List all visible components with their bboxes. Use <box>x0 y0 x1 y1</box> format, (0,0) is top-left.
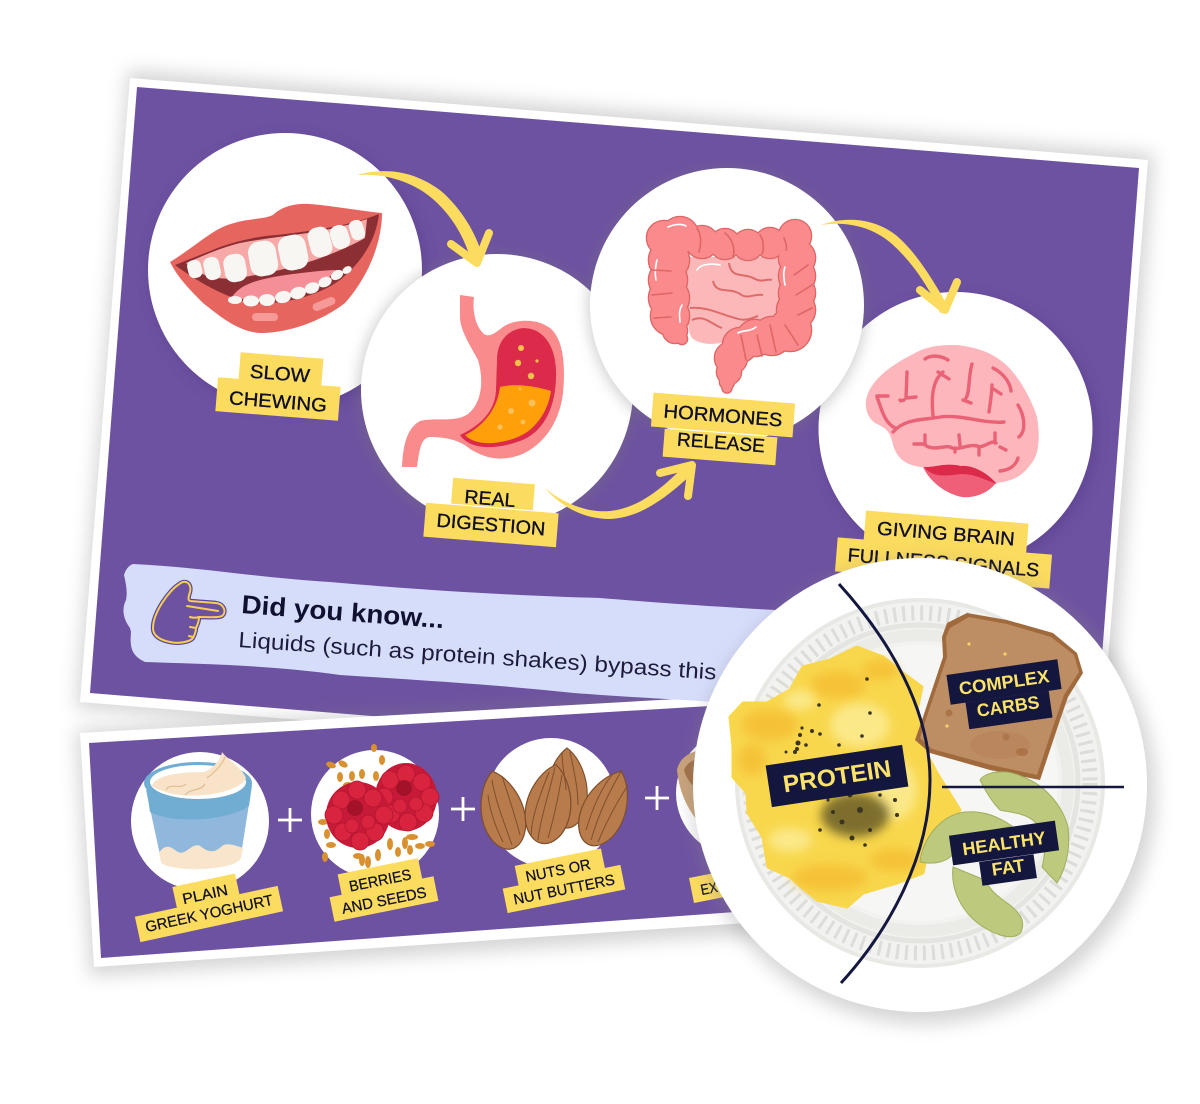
label: giving brain fullness signals <box>835 511 1052 589</box>
circle: brain <box>818 292 1096 570</box>
label: plain greek yoghurt: PLAIN <box>181 882 229 908</box>
circle: intestine <box>588 168 866 446</box>
label: healthy fat: FAT <box>990 855 1026 880</box>
label: complex carbs: COMPLEX <box>958 666 1051 699</box>
icon: plus 1 <box>278 808 302 832</box>
label: giving brain fullness signals: FULLNESS SIGNALS <box>847 545 1040 582</box>
circle: mouth <box>148 133 425 411</box>
icon: yoghurt <box>131 752 269 890</box>
label: healthy fat <box>949 821 1059 886</box>
label: extras <box>689 868 745 903</box>
icon: berries and seeds <box>311 744 439 878</box>
arrow: digestion to hormones <box>545 463 695 519</box>
label: plain greek yoghurt: GREEK YOGHURT <box>144 892 275 936</box>
heading: did you know: Did you know... <box>241 589 445 634</box>
icon: nut butter bowl <box>676 729 804 857</box>
icon: stomach <box>402 295 564 467</box>
text: liquids bypass: Liquids (such as protein shakes) bypass this <box>238 627 717 685</box>
icon: mouth <box>170 204 382 333</box>
circle: stomach <box>358 253 636 531</box>
label: nuts or nut butters <box>503 849 625 913</box>
label: protein: PROTEIN <box>781 755 893 798</box>
arrow: hormones to brain <box>821 220 957 313</box>
icon: pointing hand <box>153 582 224 643</box>
divider: arc <box>839 584 930 983</box>
label: berries and seeds: BERRIES <box>348 866 413 896</box>
label: slow chewing <box>215 352 341 421</box>
food: toast <box>915 613 1083 780</box>
panel: top card <box>76 70 1154 790</box>
label: nuts or nut butters: NUT BUTTERS <box>512 871 616 908</box>
label: protein <box>766 745 908 807</box>
arrow: chewing to digestion <box>357 171 489 263</box>
label: nuts or nut butters: NUTS OR <box>524 856 592 886</box>
label: berries and seeds: AND SEEDS <box>340 884 428 918</box>
label: real digestion: DIGESTION <box>436 511 546 540</box>
label: hormones release: RELEASE <box>676 430 766 457</box>
icon: plus 3 <box>645 786 669 810</box>
label: berries and seeds <box>330 858 438 922</box>
food: avocado <box>920 772 1069 937</box>
label: complex carbs <box>946 659 1062 729</box>
label: giving brain fullness signals: GIVING BRAIN <box>876 518 1015 550</box>
food: eggs <box>730 647 960 907</box>
panel: bottom card <box>76 686 850 976</box>
label: real digestion: REAL <box>464 487 516 512</box>
callout: did you know <box>123 564 810 708</box>
icon: plus 2 <box>451 797 475 821</box>
label: slow chewing: SLOW <box>249 362 311 387</box>
label: plain greek yoghurt <box>135 873 283 942</box>
label: hormones release <box>651 393 795 465</box>
label: healthy fat: HEALTHY <box>961 828 1047 859</box>
label: slow chewing: CHEWING <box>228 388 328 417</box>
label: hormones release: HORMONES <box>663 401 783 432</box>
panel: plate circle <box>692 558 1156 1024</box>
icon: intestine <box>647 217 815 392</box>
icon: almonds <box>472 738 641 868</box>
label: extras: EX <box>699 879 719 899</box>
label: complex carbs: CARBS <box>975 692 1041 721</box>
divider: horizontal <box>942 786 1124 788</box>
icon: brain <box>866 345 1039 497</box>
label: real digestion <box>423 478 559 547</box>
plate <box>735 598 1105 968</box>
